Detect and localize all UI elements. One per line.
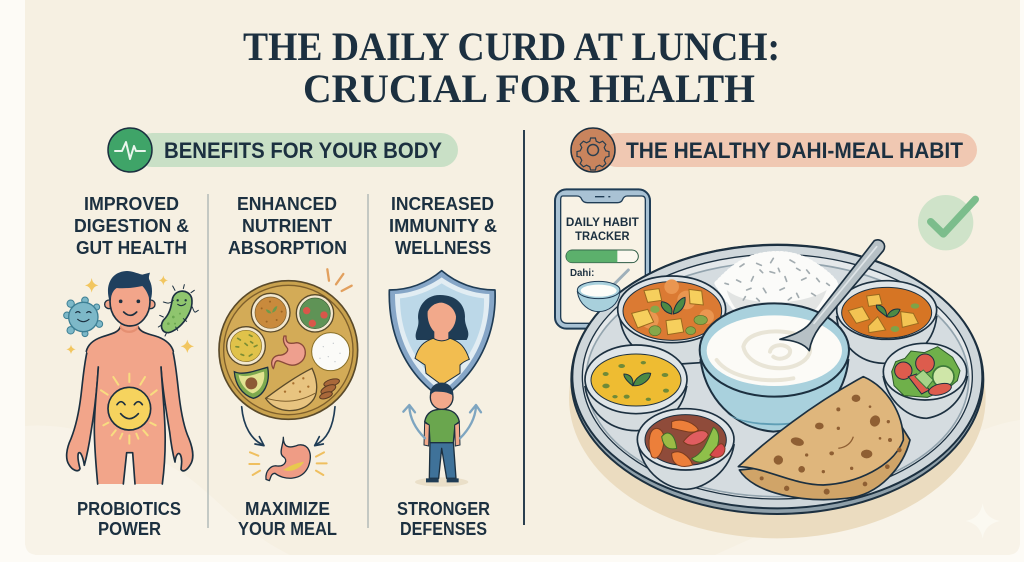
column dividers: [208, 194, 368, 528]
phone tracker: Dahi:: [570, 268, 594, 279]
plate stomach: [272, 336, 305, 369]
column 1 heading: IMPROVED: [84, 193, 179, 214]
column 2 heading: ENHANCED: [237, 193, 337, 214]
strength arrows: [403, 405, 481, 438]
avocado: [234, 367, 268, 398]
column 3 heading: IMMUNITY &: [389, 215, 497, 236]
icon: happy gut body figure: [64, 271, 198, 484]
column 1 caption: [77, 498, 181, 539]
rice: [717, 253, 836, 312]
title: CRUCIAL FOR HEALTH: [303, 66, 755, 111]
salad bowl: [883, 343, 967, 418]
column 3 heading: [389, 193, 497, 258]
column 3 caption: [397, 498, 490, 539]
icon: immunity shield with figures: [389, 271, 495, 487]
column 1 heading: GUT HEALTH: [76, 237, 187, 258]
gold sparkles: [66, 275, 194, 354]
arms: [67, 349, 98, 471]
curry bowl right: [837, 281, 937, 363]
illustration: thali and habit tracker: [555, 189, 1000, 538]
salad bowl: [296, 295, 334, 332]
sparkle: [966, 503, 1000, 538]
heading: the healthy dahi-meal habit: THE HEALTHY DAHI-MEAL HABIT: [626, 138, 963, 163]
roti: [266, 368, 317, 411]
column 2 caption: YOUR MEAL: [238, 518, 337, 539]
column 1 caption: PROBIOTICS: [77, 498, 181, 519]
column 2 caption: [238, 498, 337, 539]
column 1 caption: POWER: [98, 518, 161, 539]
centre divider: [523, 130, 525, 525]
heading: the healthy dahi-meal habit: [571, 128, 977, 172]
energy rays: [327, 269, 352, 291]
yogurt bowl: [700, 303, 849, 432]
column 3 caption: DEFENSES: [400, 518, 487, 539]
column 2 heading: ABSORPTION: [228, 237, 347, 258]
dal bowl: [227, 327, 265, 365]
phone tracker: [555, 189, 650, 329]
phone tracker: DAILY HABIT: [566, 215, 639, 229]
arrows to stomach: [242, 407, 335, 446]
heading: benefits for your body: [108, 128, 458, 172]
blue microbe: [64, 297, 103, 337]
lentil bowl: [251, 293, 290, 332]
column 3 heading: WELLNESS: [395, 237, 491, 258]
title: [243, 24, 780, 111]
plate: [569, 245, 986, 538]
column 2 caption: MAXIMIZE: [245, 498, 330, 519]
title: THE DAILY CURD AT LUNCH:: [243, 24, 780, 69]
column 3 heading: INCREASED: [391, 193, 494, 214]
curry bowl left: [618, 276, 726, 364]
column 2 heading: [228, 193, 347, 258]
man: [415, 383, 468, 487]
dal bowl: [585, 345, 687, 431]
check mark badge: [918, 195, 975, 250]
icon: nutrient plate and stomach: [219, 269, 358, 481]
happy stomach face: [101, 374, 157, 444]
column 3 caption: STRONGER: [397, 498, 490, 519]
green bacterium: [158, 285, 198, 336]
column 2 heading: NUTRIENT: [242, 215, 333, 236]
column 1 heading: DIGESTION &: [74, 215, 189, 236]
rice: [312, 333, 350, 371]
nuts: [319, 377, 340, 400]
heading: benefits for your body: BENEFITS FOR YOUR BODY: [164, 138, 442, 163]
lower stomach: [249, 437, 327, 481]
column 1 heading: [74, 193, 189, 258]
vegetable bowl: [637, 409, 734, 489]
roti: [738, 377, 910, 500]
head: [105, 300, 113, 309]
spoon: [780, 240, 885, 351]
torso: [86, 324, 173, 484]
phone tracker: TRACKER: [575, 229, 630, 243]
phone dahi bowl: [577, 270, 628, 312]
woman: [415, 295, 469, 385]
